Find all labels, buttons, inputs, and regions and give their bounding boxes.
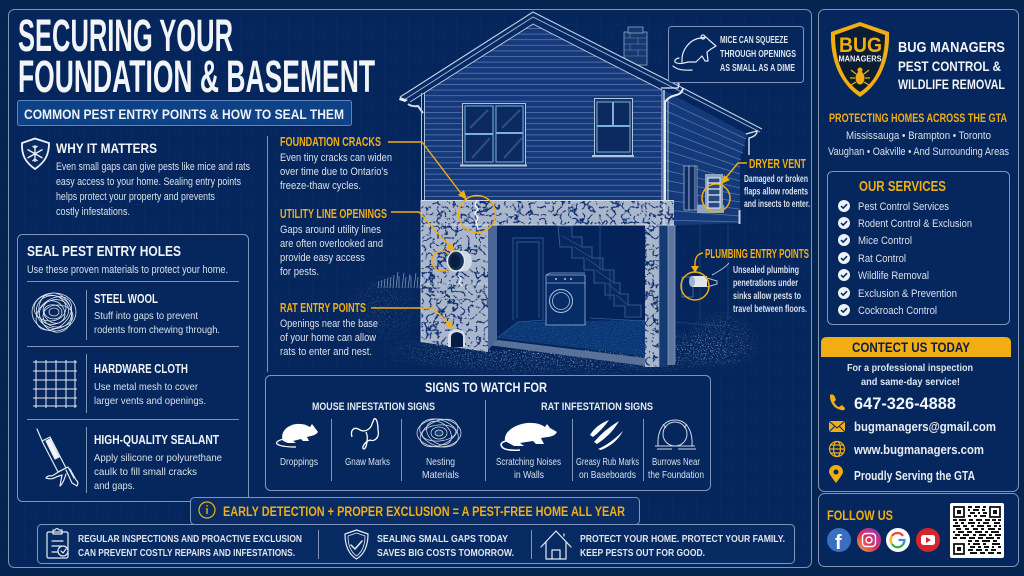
panel: seal pest entry holes: STEEL WOOL — [94, 292, 158, 306]
subtitle banner — [18, 100, 352, 126]
callouts: left entry points: over time due to Ontario's — [280, 166, 389, 178]
crack — [475, 200, 478, 229]
panel: company sidebar — [818, 10, 1018, 492]
title — [18, 10, 375, 102]
leader lines and markers — [371, 142, 747, 329]
panel: signs to watch for: Burrows Near — [652, 456, 700, 468]
panel: signs to watch for: on Baseboards — [579, 469, 636, 481]
services box: OUR SERVICES — [859, 178, 946, 195]
icon: location pin — [829, 465, 843, 483]
house illustration — [345, 12, 765, 377]
panel: seal pest entry holes: rodents from chewing through. — [94, 324, 220, 336]
callouts: left entry points: provide easy access — [280, 252, 366, 264]
panel: seal pest entry holes: larger vents and openings. — [94, 395, 206, 407]
panel: signs to watch for: the Foundation — [648, 469, 704, 481]
services box — [828, 172, 1010, 324]
callout: plumbing entry points: travel between floors. — [733, 304, 807, 315]
why it matters — [22, 138, 250, 218]
icon: instagram — [857, 528, 881, 552]
bottom message strip: SAVES BIG COSTS TOMORROW. — [377, 547, 514, 559]
washer — [546, 273, 585, 325]
icon: hardware cloth — [33, 360, 77, 408]
stairs — [558, 226, 641, 317]
icon: phone — [830, 394, 845, 410]
icon: mouse outline — [673, 35, 716, 70]
icon: burrow — [655, 420, 696, 449]
contact heading: CONTECT US TODAY — [852, 340, 970, 355]
early detection banner: EARLY DETECTION + PROPER EXCLUSION = A PEST-FREE HOME ALL YEAR — [223, 504, 625, 519]
panel: follow us — [818, 494, 1018, 566]
why it matters: WHY IT MATTERS — [56, 140, 157, 156]
callout: mice dime: MICE CAN SQUEEZE — [720, 35, 788, 46]
services box: Rodent Control & Exclusion — [858, 218, 972, 230]
title: SECURING YOUR — [18, 10, 233, 61]
logo shield — [831, 22, 889, 97]
why it matters: easy access to your home. Sealing entry points — [56, 176, 241, 188]
callout: plumbing entry points: penetrations under — [733, 278, 798, 289]
contact heading — [821, 337, 1011, 357]
callouts: left entry points: Openings near the base — [280, 318, 378, 330]
panel: signs to watch for: MOUSE INFESTATION SIGNS — [312, 401, 435, 413]
panel: company sidebar: For a professional inspection — [847, 362, 973, 374]
icon: clipboard check — [47, 528, 68, 558]
plumbing pipe — [682, 263, 729, 297]
icon: shield check — [345, 530, 368, 559]
panel: company sidebar: bugmanagers@gmail.com — [854, 419, 996, 434]
icon: nest — [416, 414, 462, 452]
callout: plumbing entry points: Unsealed plumbing — [733, 265, 799, 276]
panel: seal pest entry holes: HIGH-QUALITY SEALANT — [94, 433, 219, 447]
services box: Wildlife Removal — [858, 270, 929, 282]
bottom message strip: SEALING SMALL GAPS TODAY — [377, 533, 508, 545]
panel: company sidebar: Mississauga • Brampton • Toronto — [846, 130, 991, 142]
bottom message strip: CAN PREVENT COSTLY REPAIRS AND INFESTATIONS. — [78, 547, 295, 559]
callout: dryer vent: DRYER VENT — [749, 157, 806, 171]
foundation left pier — [421, 225, 488, 352]
callouts: left entry points: UTILITY LINE OPENINGS — [280, 207, 387, 221]
logo shield: BUG — [839, 34, 882, 57]
callout: plumbing entry points — [705, 247, 809, 315]
icon: google — [886, 528, 910, 552]
panel: signs to watch for: Droppings — [280, 456, 318, 468]
panel: seal pest entry holes: HARDWARE CLOTH — [94, 362, 188, 376]
callouts: left entry points: are often overlooked and — [280, 238, 383, 250]
panel: seal pest entry holes: Apply silicone or polyurethane — [94, 452, 222, 464]
logo shield: MANAGERS — [838, 54, 882, 64]
bottom message strip: PROTECT YOUR HOME. PROTECT YOUR FAMILY. — [580, 533, 785, 545]
panel: company sidebar: Proudly Serving the GTA — [854, 469, 975, 483]
main panel — [8, 10, 812, 568]
chimney — [624, 27, 647, 65]
callouts: left entry points: Even tiny cracks can widen — [280, 152, 392, 164]
why it matters: costly infestations. — [56, 206, 130, 218]
callout: dryer vent: flaps allow rodents — [744, 186, 808, 198]
services box: Exclusion & Prevention — [858, 288, 957, 300]
dryer vent — [684, 166, 724, 213]
panel: company sidebar: www.bugmanagers.com — [853, 442, 984, 457]
panel: seal pest entry holes: Use these proven materials to protect your home. — [27, 264, 228, 276]
panel: company sidebar: and same-day service! — [861, 376, 960, 388]
callouts: left entry points: of your home can allow — [280, 332, 376, 344]
callout: mice dime — [668, 26, 804, 82]
bottom message strip — [38, 524, 794, 564]
services box: Pest Control Services — [858, 201, 949, 213]
utility pipe — [448, 251, 472, 271]
subtitle banner: COMMON PEST ENTRY POINTS & HOW TO SEAL THEM — [24, 106, 344, 122]
ground speckle — [345, 272, 765, 377]
panel: signs to watch for: in Walls — [514, 469, 544, 481]
windows — [460, 98, 634, 166]
basement interior — [488, 225, 645, 366]
callouts: left entry points: rats to enter and nest. — [280, 346, 372, 358]
services box: Mice Control — [858, 235, 912, 247]
icon: email — [829, 421, 845, 432]
panel: company sidebar: BUG MANAGERS — [898, 40, 1005, 56]
panel: seal pest entry holes: SEAL PEST ENTRY HOLES — [27, 244, 181, 260]
bottom message strip: REGULAR INSPECTIONS AND PROACTIVE EXCLUSION — [78, 533, 302, 545]
callouts: left entry points — [280, 135, 392, 358]
check icons — [838, 200, 850, 316]
callouts: left entry points: FOUNDATION CRACKS — [280, 135, 381, 149]
panel: company sidebar: 647-326-4888 — [854, 394, 956, 413]
icon: house — [541, 531, 571, 559]
right pier — [645, 225, 675, 367]
icon: youtube — [916, 528, 940, 552]
icon: info — [199, 502, 215, 518]
early detection banner — [190, 498, 640, 524]
panel: signs to watch for: Greasy Rub Marks — [576, 456, 639, 468]
icon: facebook: f — [835, 532, 842, 554]
callouts: left entry points: RAT ENTRY POINTS — [280, 301, 366, 315]
panel: seal pest entry holes: and gaps. — [94, 480, 135, 492]
icon: scratch marks — [590, 420, 623, 450]
panel: company sidebar: PEST CONTROL & — [898, 58, 1001, 74]
icon: facebook — [827, 528, 851, 554]
callout: dryer vent — [744, 157, 810, 210]
icon: globe — [830, 442, 844, 456]
callouts: left entry points: Gaps around utility lines — [280, 224, 382, 236]
title: FOUNDATION & BASEMENT — [18, 51, 375, 102]
panel: signs to watch for: Nesting — [426, 456, 455, 468]
icon: caulk gun — [37, 429, 78, 486]
panel: signs to watch for — [266, 376, 710, 490]
callout: dryer vent: and insects to enter. — [744, 199, 810, 210]
panel: signs to watch for: Gnaw Marks — [345, 456, 390, 468]
services box: Cockroach Control — [858, 305, 937, 317]
callout: mice dime: AS SMALL AS A DIME — [720, 63, 795, 74]
foundation beam — [421, 200, 674, 342]
panel: seal pest entry holes: caulk to fill small cracks — [94, 466, 197, 478]
panel: signs to watch for: Scratching Noises — [496, 456, 561, 468]
panel: seal pest entry holes — [18, 234, 248, 502]
callout: plumbing entry points: sinks allow pests to — [733, 291, 801, 302]
callouts: left entry points: freeze-thaw cycles. — [280, 180, 361, 192]
door — [513, 238, 543, 320]
callout: mice dime: THROUGH OPENINGS — [720, 49, 796, 60]
front wall — [425, 24, 662, 200]
side wall — [664, 90, 747, 226]
services box: Rat Control — [858, 253, 906, 265]
panel: follow us: FOLLOW US — [827, 508, 893, 523]
icon: rat — [501, 423, 557, 450]
icon: mouse — [277, 424, 318, 447]
panel: seal pest entry holes: Use metal mesh to cover — [94, 381, 198, 393]
panel: signs to watch for: Materials — [422, 469, 459, 481]
callout: plumbing entry points: PLUMBING ENTRY POINTS — [705, 247, 809, 261]
icon: shield snowflake — [22, 138, 49, 169]
panel: seal pest entry holes: Stuff into gaps to prevent — [94, 310, 198, 322]
bottom message strip: KEEP PESTS OUT FOR GOOD. — [580, 547, 705, 559]
icon: steel wool — [30, 288, 78, 337]
qr code — [950, 503, 1004, 558]
why it matters: Even small gaps can give pests like mice and rats — [56, 161, 250, 173]
icon: gnaw marks — [351, 419, 378, 449]
roof — [399, 12, 762, 225]
panel: signs to watch for: SIGNS TO WATCH FOR — [425, 380, 547, 395]
why it matters: helps protect your property and prevents — [56, 191, 215, 203]
panel: signs to watch for: RAT INFESTATION SIGNS — [541, 401, 653, 413]
callout: dryer vent: Damaged or broken — [744, 174, 808, 185]
rat hole — [448, 329, 465, 347]
faint rear wall — [675, 225, 728, 326]
callouts: left entry points: for pests. — [280, 266, 319, 278]
